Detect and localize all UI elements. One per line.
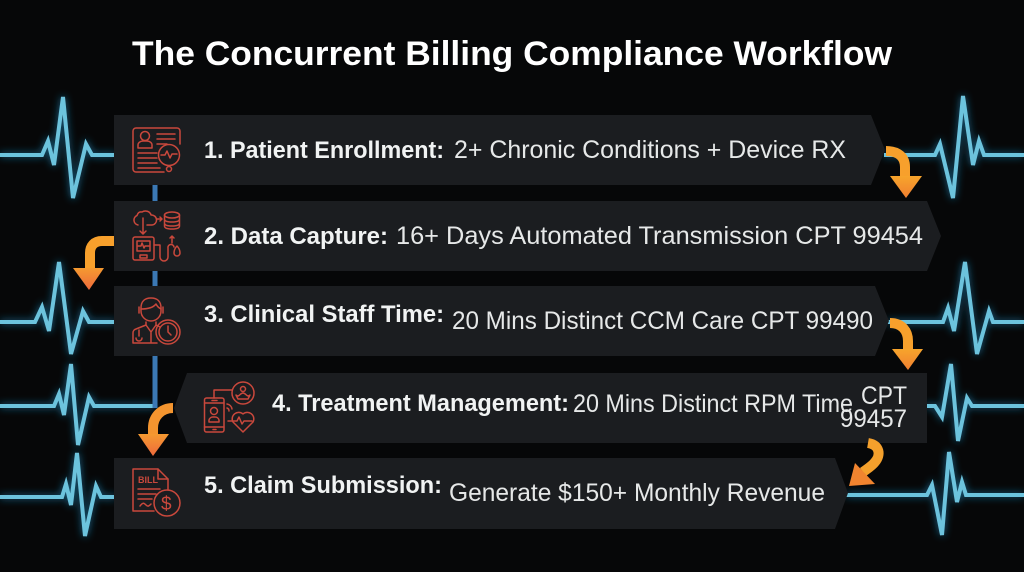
arrow: step 2 to step 3 <box>73 241 114 290</box>
ECG line: row 5 right <box>846 452 1024 535</box>
ECG line: row 1 right <box>884 96 1024 198</box>
title: The Concurrent Billing Compliance Workflow <box>132 35 893 73</box>
step 4 CPT code: CPT <box>861 382 907 410</box>
step 3 heading: 3. Clinical Staff Time: <box>204 301 444 328</box>
step 1 heading: 1. Patient Enrollment: <box>204 137 444 164</box>
icon: bill with dollar coin <box>133 469 180 516</box>
panel: step 2 <box>114 201 941 271</box>
panel: step 1 <box>114 115 885 185</box>
step 2 description: 16+ Days Automated Transmission CPT 99454 <box>396 222 923 250</box>
ECG line: row 3 right <box>887 262 1024 354</box>
step 4 heading: 4. Treatment Management: <box>272 390 569 417</box>
arrow: step 1 to step 2 <box>886 151 922 198</box>
step 3 description: 20 Mins Distinct CCM Care CPT 99490 <box>452 307 873 335</box>
panel: step 5 <box>114 458 848 529</box>
arrow: step 4 to step 5 <box>138 408 173 456</box>
icon: clinician with clock <box>133 298 180 344</box>
icon: bill with dollar coin: $ <box>161 494 172 515</box>
step 4 description: 20 Mins Distinct RPM Time <box>573 390 853 418</box>
ECG line: row 4 left <box>0 364 155 445</box>
ECG line: row 5 left <box>0 453 116 536</box>
step 4 CPT code: 99457 <box>840 405 907 433</box>
step 4 CPT code <box>840 382 907 433</box>
step 5 description: Generate $150+ Monthly Revenue <box>449 479 825 507</box>
arrow: step 4 to step 5 right side <box>849 443 879 486</box>
step 1 description: 2+ Chronic Conditions + Device RX <box>454 136 846 164</box>
step 2 heading: 2. Data Capture: <box>204 223 388 250</box>
icon: phone with remote monitoring <box>204 382 254 432</box>
arrow: step 3 to step 4 <box>890 323 923 370</box>
blue connector line <box>152 183 158 408</box>
ECG line: row 4 right <box>925 364 1024 441</box>
panel: step 4 <box>174 373 927 443</box>
icon: patient record with heart monitor <box>133 128 180 172</box>
icon: bill with dollar coin: BILL <box>138 475 158 486</box>
icon: cloud, database and device <box>133 211 180 261</box>
step 5 heading: 5. Claim Submission: <box>204 472 442 499</box>
ECG line: row 3 left <box>0 262 116 354</box>
panel: step 3 <box>114 286 889 356</box>
ECG line: row 1 left <box>0 97 116 198</box>
